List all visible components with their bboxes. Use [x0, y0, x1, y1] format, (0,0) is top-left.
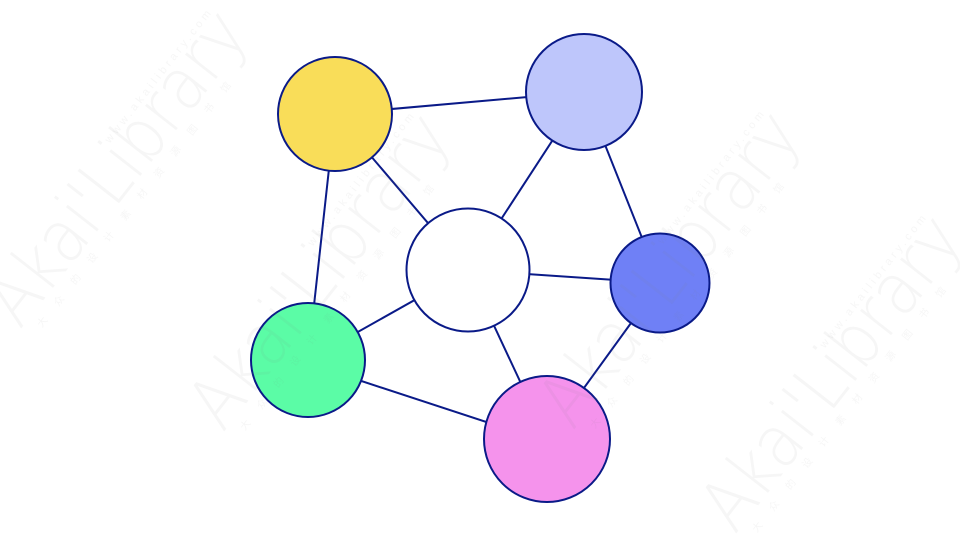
node: yellow circle — [278, 57, 392, 171]
watermark 3: 大众的设计素材资源图书馆 — [587, 180, 787, 431]
node: blue circle — [610, 234, 710, 332]
watermark 1: www.akailibrary.com — [102, 8, 214, 146]
node: lavender circle — [526, 34, 642, 150]
node: pink circle — [484, 376, 610, 502]
watermark 2: www.akailibrary.com — [305, 111, 417, 249]
watermark 2: 大众的设计素材资源图书馆 — [237, 182, 437, 433]
watermark 1: 大众的设计素材资源图书馆 — [34, 79, 234, 330]
node: green circle — [251, 303, 365, 417]
watermark 4: www.akailibrary.com — [817, 213, 929, 351]
watermark 3: Akai'Library — [520, 94, 817, 441]
connecting lines — [308, 92, 660, 439]
watermark 4: 大众的设计素材资源图书馆 — [749, 284, 949, 535]
watermark 3: www.akailibrary.com — [655, 109, 767, 247]
node: white center circle — [406, 208, 530, 332]
watermark 2: Akai'Library — [170, 96, 467, 443]
